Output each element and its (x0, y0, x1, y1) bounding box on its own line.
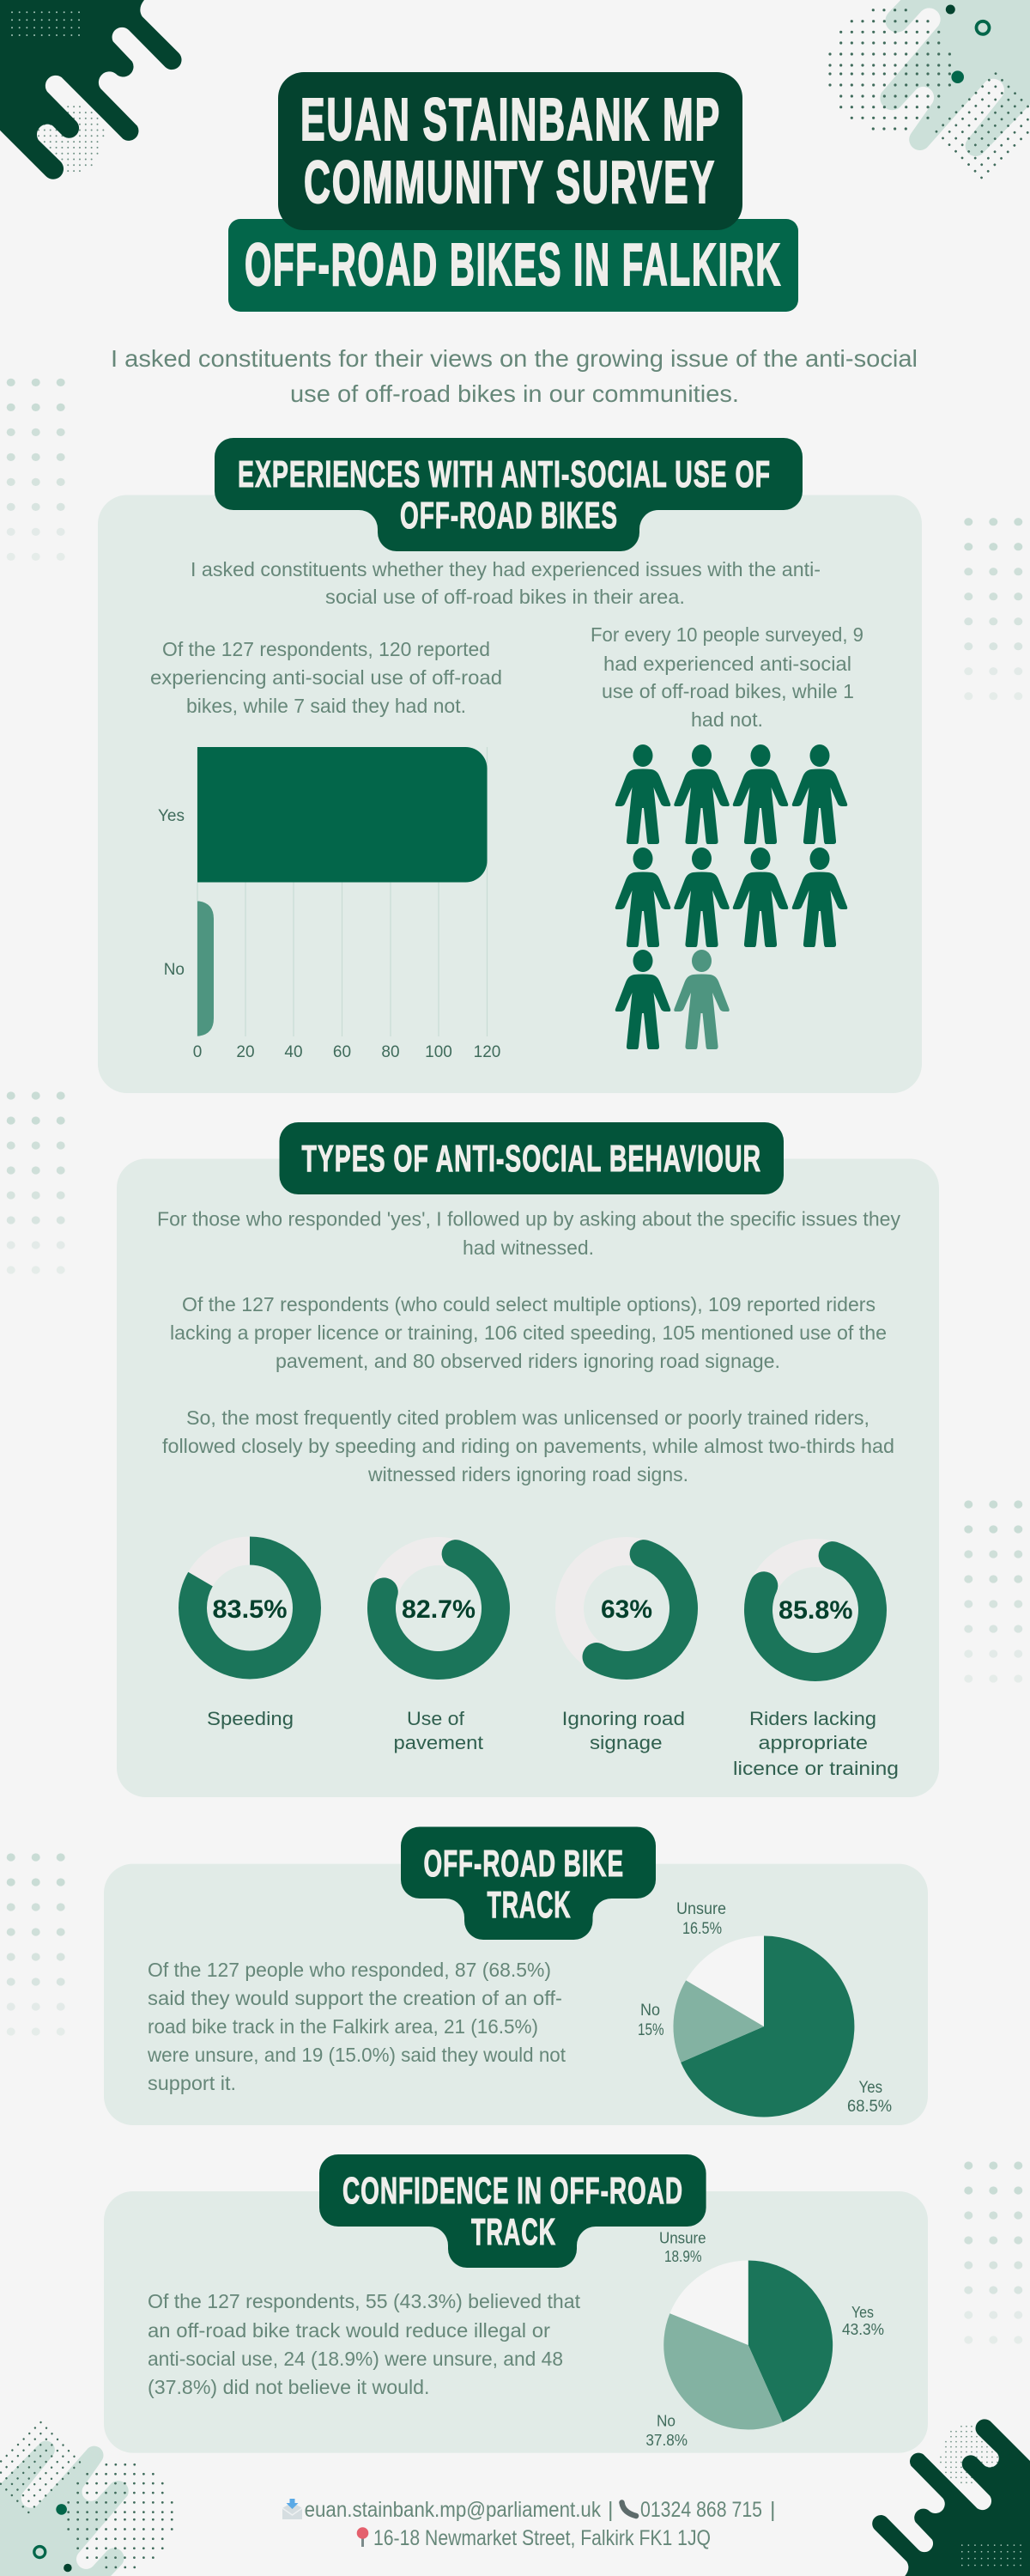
pie chart: support: 16.5% (682, 1920, 722, 1938)
pie chart: support: 15% (638, 2021, 664, 2039)
heading: confidence: CONFIDENCE IN OFF-ROAD (342, 2170, 683, 2212)
donut: riders lacking licence: 85.8% (779, 1596, 853, 1625)
donut: ignoring road signage: Ignoring road (562, 1708, 685, 1729)
panel: off-road bike track (104, 1827, 928, 2125)
pie chart: confidence: 37.8% (645, 2432, 688, 2449)
heading: off-road bike track: OFF-ROAD BIKE (424, 1843, 624, 1885)
axis ticks: 100 (425, 1043, 452, 1061)
category labels: Yes (158, 807, 185, 825)
panel: experiences (98, 438, 922, 1093)
heading: types (280, 1122, 784, 1194)
heading: experiences: OFF-ROAD BIKES (400, 495, 618, 537)
heading: off-road bike track (401, 1827, 656, 1940)
paragraph text: were unsure, and 19 (15.0%) said they would not (147, 2044, 566, 2066)
pictogram: 10 people (615, 744, 847, 1049)
donut: speeding: 83.5% (213, 1595, 287, 1624)
panel background (104, 1864, 928, 2125)
paragraph text: support it. (148, 2072, 236, 2094)
heading: off-road bike track: TRACK (488, 1884, 572, 1926)
text: ratio summary: had not. (691, 708, 763, 731)
paragraph text: So, the most frequently cited problem was unlicensed or poorly trained riders, (186, 1406, 869, 1429)
decoration: bottom-left light shape (0, 2421, 172, 2576)
axis ticks (193, 1043, 500, 1061)
axis ticks: 60 (333, 1043, 351, 1061)
intro text: I asked constituents for their views on the growing issue of the anti-social (111, 345, 918, 372)
icon: phone (621, 2502, 636, 2516)
donut: speeding (192, 1551, 307, 1729)
panel background (117, 1159, 939, 1797)
pie chart: support: Unsure (676, 1900, 726, 1918)
donut: riders lacking licence: Riders lacking (749, 1708, 876, 1729)
bar: no (197, 902, 214, 1036)
divider: | (608, 2498, 613, 2522)
axis ticks: 80 (381, 1043, 400, 1061)
paragraph text: lacking a proper licence or training, 106 cited speeding, 105 mentioned use of the (170, 1321, 887, 1344)
decoration: top-right light shape (830, 0, 1030, 179)
footer contact details (282, 2498, 776, 2550)
paragraph text: said they would support the creation of an off- (148, 1987, 562, 2009)
paragraph text: Of the 127 people who responded, 87 (68.5%) (148, 1959, 551, 1981)
paragraph text: (37.8%) did not believe it would. (148, 2376, 430, 2398)
donut: ignoring road signage (555, 1537, 698, 1753)
email: euan.stainbank.mp@parliament.uk (305, 2498, 601, 2522)
pie chart: confidence: Yes (851, 2304, 874, 2321)
paragraph text (147, 1959, 566, 2094)
heading: confidence: TRACK (471, 2211, 556, 2253)
panel background (104, 2191, 928, 2453)
pie chart: support: No (640, 2002, 660, 2020)
pie chart: confidence: 43.3% (842, 2321, 884, 2338)
text: respondents summary (150, 638, 502, 717)
donut: ignoring road signage: 63% (601, 1595, 652, 1624)
paragraph text: road bike track in the Falkirk area, 21 (16.5%) (148, 2015, 538, 2038)
donut: riders lacking licence (733, 1539, 899, 1779)
paragraph text (148, 2290, 581, 2398)
category labels: No (164, 961, 185, 979)
text: respondents summary: experiencing anti-social use of off-road (150, 666, 502, 689)
title text (300, 86, 721, 216)
paragraph text: witnessed riders ignoring road signs. (367, 1463, 688, 1485)
axis ticks: 0 (193, 1043, 202, 1061)
text: ratio summary: use of off-road bikes, while 1 (602, 680, 854, 702)
paragraph text: followed closely by speeding and riding on pavements, while almost two-thirds had (162, 1435, 894, 1457)
axis ticks: 20 (236, 1043, 255, 1061)
axis ticks: 120 (474, 1043, 500, 1061)
donut: use of pavement (367, 1537, 510, 1753)
icon: mail (282, 2499, 302, 2519)
panel intro text: social use of off-road bikes in their area. (325, 586, 685, 608)
intro text (111, 345, 918, 407)
phone number: 01324 868 715 (640, 2498, 762, 2522)
donut: ignoring road signage: signage (590, 1732, 663, 1753)
donut: riders lacking licence: appropriate (759, 1732, 868, 1753)
bar: yes (197, 747, 488, 883)
text: ratio summary: had experienced anti-social (603, 653, 851, 675)
donut: use of pavement: Use of (407, 1708, 465, 1729)
paragraph text: anti-social use, 24 (18.9%) were unsure, and 48 (148, 2348, 563, 2370)
donut: riders lacking licence: licence or training (733, 1758, 899, 1779)
text: respondents summary: Of the 127 respondents, 120 reported (162, 638, 490, 660)
panel: confidence in track (104, 2154, 928, 2453)
bar chart (158, 747, 500, 1061)
panel intro text (191, 558, 821, 608)
paragraph text (157, 1207, 900, 1485)
text: respondents summary: bikes, while 7 said they had not. (186, 695, 466, 717)
title text: COMMUNITY SURVEY (304, 149, 716, 216)
paragraph text: had witnessed. (463, 1236, 594, 1259)
panel background (98, 495, 922, 1093)
text: ratio summary: For every 10 people surveyed, 9 (591, 623, 863, 646)
subtitle band (228, 219, 798, 312)
paragraph text: Of the 127 respondents (who could select multiple options), 109 reported riders (182, 1293, 876, 1315)
heading: types: TYPES OF ANTI-SOCIAL BEHAVIOUR (302, 1138, 761, 1180)
title band (278, 72, 742, 230)
title text: EUAN STAINBANK MP (300, 86, 721, 153)
address: 16-18 Newmarket Street, Falkirk FK1 1JQ (373, 2526, 711, 2550)
intro text: use of off-road bikes in our communities. (290, 380, 739, 407)
pie chart: confidence: No (657, 2413, 676, 2430)
pie chart: confidence: Unsure (659, 2230, 706, 2247)
panel intro text: I asked constituents whether they had experienced issues with the anti- (191, 558, 821, 580)
divider: | (770, 2498, 776, 2522)
paragraph text: an off-road bike track would reduce illegal or (148, 2319, 550, 2342)
text: ratio summary (591, 623, 863, 731)
paragraph text: For those who responded 'yes', I followed up by asking about the specific issues they (157, 1207, 900, 1230)
decoration: top-left dark shape (0, 0, 182, 179)
donut: use of pavement: 82.7% (402, 1595, 476, 1624)
pie chart: support: 68.5% (847, 2098, 892, 2116)
pie chart: support: Yes (858, 2079, 882, 2097)
title block (228, 72, 798, 312)
pie chart: confidence (645, 2230, 884, 2449)
heading: confidence (319, 2154, 706, 2268)
donut: speeding: Speeding (207, 1708, 294, 1729)
decoration: bottom-right dark shape (872, 2419, 1030, 2576)
decoration: side dot grids (7, 379, 1022, 2344)
category labels (158, 807, 185, 979)
pie chart: support (638, 1900, 892, 2117)
pie chart: confidence: 18.9% (664, 2248, 702, 2265)
heading: experiences (215, 438, 803, 551)
paragraph text: pavement, and 80 observed riders ignoring road signage. (276, 1350, 780, 1372)
paragraph text: Of the 127 respondents, 55 (43.3%) believed that (148, 2290, 581, 2312)
axis ticks: 40 (284, 1043, 303, 1061)
icon: map pin (357, 2527, 368, 2547)
panel: types of behaviour (117, 1122, 939, 1797)
donut: use of pavement: pavement (393, 1732, 483, 1753)
